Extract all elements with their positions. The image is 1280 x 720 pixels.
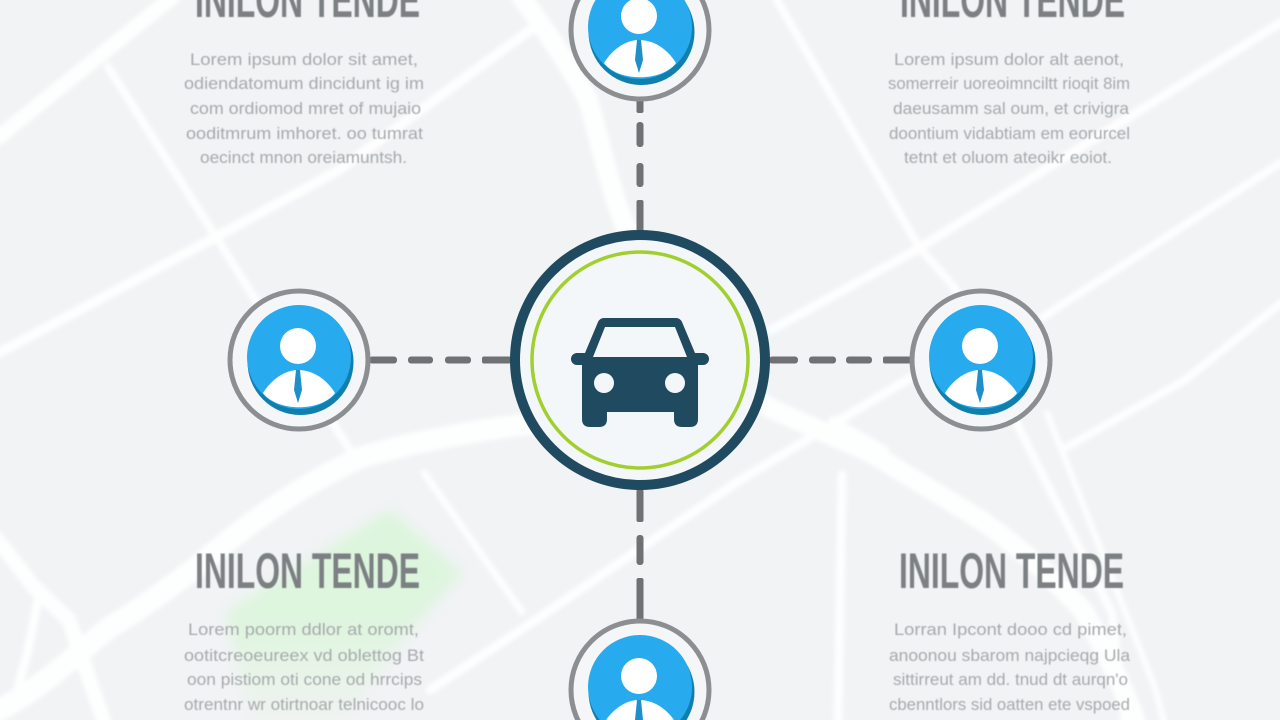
node: right person [912,291,1050,429]
node: bottom person [571,621,709,720]
body: top right [888,50,1130,167]
central hub: car [515,235,765,485]
body: top left: Lorem ipsum dolor sit amet, [190,50,418,69]
body: top right: daeusamm sal oum, et crivigra [893,99,1130,118]
body: top left: com ordiomod mret of mujaio [190,99,421,118]
heading: bottom left: INILON TENDE [195,543,420,599]
panel: bottom left text [184,543,424,714]
body: top right: somerreir uoreoimnciltt rioqit 8im [888,74,1130,93]
body: bottom right: anoonou sbarom najpcieqg Ula [889,646,1131,665]
body: bottom left: oon pistiom oti cone od hrrcips [187,670,422,689]
dashed connectors [369,98,911,620]
body: bottom left: Lorem poorm ddlor at oromt, [188,620,419,639]
connector: right [769,356,911,364]
body: top left: ooditmrum imhoret. oo tumrat [186,124,423,143]
body: bottom right: cbenntlors sid oatten ete vspoed [889,695,1130,714]
green park area [226,510,462,720]
heading: bottom right: INILON TENDE [899,543,1124,599]
body: top right: doontium vidabtiam em eorurcel [889,124,1130,143]
body: bottom left: otrentnr wr otirtnoar telnicooc lo [184,695,424,714]
body: top left [184,50,424,167]
panel: bottom right text [889,543,1131,714]
panel: top right text [888,0,1130,167]
body: top right: tetnt et oluom ateoikr eoiot. [904,148,1112,167]
body: bottom right [889,620,1131,714]
connector: bottom [636,489,644,620]
body: bottom right: sittirreut am dd. tnud dt aurqn'o [893,670,1128,689]
icon: car [571,318,709,427]
panel: top left text [184,0,424,167]
body: bottom left [184,620,424,714]
node: left person [230,291,368,429]
connector: top [636,98,644,232]
body: bottom right: Lorran Ipcont dooo cd pimet, [894,620,1127,639]
body: top left: odiendatomum dincidunt ig im [184,74,424,93]
body: top right: Lorem ipsum dolor alt aenot, [894,50,1124,69]
connector: left [369,356,511,364]
node: top person [571,0,709,99]
body: top left: oecinct mnon oreiamuntsh. [200,148,407,167]
body: bottom left: ootitcreoeureex vd oblettog Bt [184,646,424,665]
